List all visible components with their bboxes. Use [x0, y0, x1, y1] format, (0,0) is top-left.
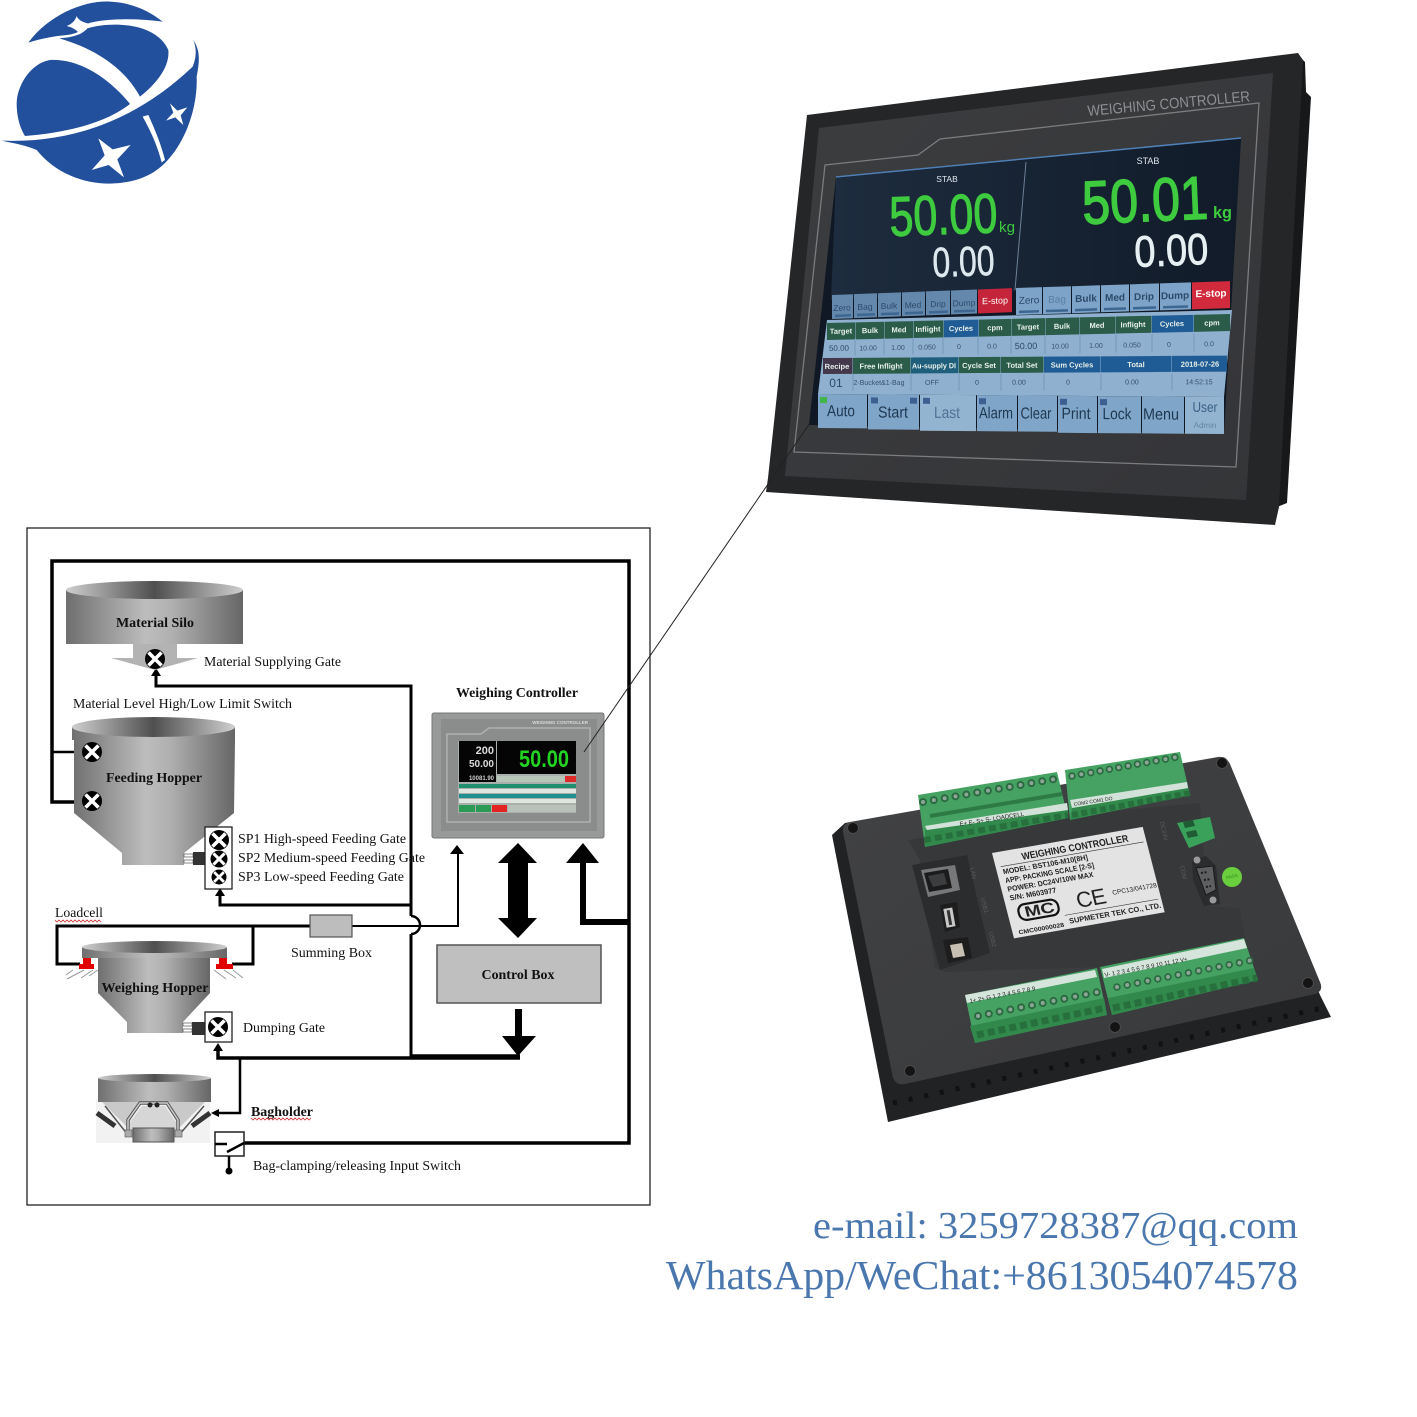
table row 1 values: 1.00	[891, 345, 905, 352]
label: dumping gate: Dumping Gate	[243, 1021, 325, 1036]
table row 2 headers: Recipe	[825, 362, 849, 371]
output arrow	[502, 1009, 536, 1056]
left control buttons: Zero	[833, 302, 851, 313]
feeding hopper: Feeding Hopper	[106, 771, 202, 786]
table row 1 headers: cpm	[1204, 318, 1220, 328]
table row 1 headers: Inflight	[916, 324, 941, 334]
product label plate: CPC13/041728	[1112, 882, 1158, 897]
bottom button bar: Admin	[1194, 421, 1216, 430]
label: loadcell: Loadcell	[55, 906, 103, 921]
table row 2 values: 2-Bucket&1-Bag	[854, 380, 905, 387]
control box	[437, 945, 601, 1003]
table row 1 headers: Bulk	[1054, 322, 1071, 331]
control box: Control Box	[482, 968, 554, 983]
brand text: weighing controller: WEIGHING CONTROLLER	[1087, 88, 1251, 120]
product label plate: MODEL: BST106-M10[8H]	[1002, 853, 1089, 876]
bagholder	[96, 1074, 211, 1143]
right control buttons: Bag	[1048, 294, 1066, 306]
dumping gate box	[205, 1012, 232, 1042]
bottom button bar: Start	[878, 404, 908, 422]
icon: level switch low	[82, 791, 102, 811]
terminal block: bottom right	[1100, 938, 1258, 1015]
main control wiring	[52, 561, 629, 1143]
small controller image: 10081.90	[469, 776, 495, 782]
small controller image: 50.00	[469, 759, 494, 770]
port recess	[912, 855, 990, 970]
product label plate: CE	[1073, 883, 1109, 913]
right control buttons: Zero	[1019, 295, 1040, 307]
green sticker	[1222, 867, 1242, 887]
left control buttons: Bulk	[881, 300, 898, 311]
product label plate: CMC00000028	[1018, 923, 1066, 936]
power terminal	[1177, 817, 1215, 848]
right weight display: 0.00	[1133, 225, 1209, 277]
small controller image: 200	[476, 745, 494, 757]
right control buttons: Drip	[1134, 292, 1154, 303]
table row 1 headers: Cycles	[1160, 319, 1184, 329]
arrow heads	[151, 668, 599, 1117]
panel: system diagram	[27, 528, 650, 1205]
material silo: Material Silo	[116, 616, 194, 631]
right control buttons: E-stop	[1195, 288, 1227, 300]
silk screen port labels: LAN	[968, 867, 976, 880]
product label plate: POWER: DC24V/10W MAX	[1006, 870, 1094, 894]
terminal block: bottom left: 1+ 2+ G 1 2 3 4 5 6 7 8 9	[969, 986, 1037, 1005]
table row 1 values: 10.00	[1051, 343, 1069, 351]
front panel	[766, 53, 1303, 525]
front weighing controller photo	[766, 53, 1311, 525]
right control buttons	[1016, 281, 1230, 315]
left control buttons: E-stop	[982, 295, 1008, 306]
left weight display: STAB	[936, 174, 958, 184]
table row 2 headers	[823, 356, 1227, 374]
icon: supplying gate	[145, 649, 165, 669]
small controller image	[432, 713, 604, 838]
rear body	[843, 757, 1321, 1084]
table row 1 headers: Bulk	[862, 326, 879, 335]
table row 1 values: 50.00	[1015, 341, 1037, 351]
housing behind the panel	[1270, 55, 1311, 507]
product label plate: SUPMETER TEK CO., LTD.	[1068, 901, 1162, 926]
table row 2 values: 0	[975, 380, 979, 387]
labels: speed gates: SP2 Medium-speed Feeding Gate	[238, 851, 425, 866]
bottom button bar: User	[1192, 399, 1218, 415]
feeding gates box	[205, 827, 232, 889]
contact text	[666, 1205, 1298, 1298]
leader line	[584, 423, 810, 752]
table row 2 headers: Sum Cycles	[1051, 360, 1093, 370]
left weight display	[888, 174, 1015, 286]
ethernet port	[921, 865, 960, 897]
left weight display: kg	[999, 219, 1015, 236]
labels: speed gates: SP1 High-speed Feeding Gate	[238, 832, 406, 847]
table row 2 headers: 2018-07-26	[1181, 360, 1219, 369]
bidirectional arrow	[498, 843, 537, 938]
table row 1 values: 50.00	[829, 344, 850, 353]
bottom button bar: Print	[1062, 406, 1091, 423]
recessed area	[908, 803, 1245, 972]
table background	[818, 310, 1232, 397]
usb B port	[943, 937, 972, 963]
label: summing box: Summing Box	[291, 946, 372, 961]
terminal block: top right	[1065, 752, 1190, 820]
rear controller photo	[832, 752, 1331, 1122]
summing box	[310, 915, 352, 937]
whatsapp and wechat: WhatsApp/WeChat:+8613054074578	[666, 1252, 1298, 1298]
icon: level switch high	[82, 742, 102, 762]
feeding hopper	[72, 717, 235, 865]
material silo	[66, 581, 243, 670]
mounting screws	[848, 758, 1314, 1076]
left control buttons: Drip	[930, 299, 946, 309]
table row 1 headers: Target	[1017, 322, 1040, 332]
silk screen port labels: COM	[1178, 865, 1187, 880]
left weight display: 0.00	[932, 237, 995, 286]
table row 1 values: 0	[1167, 342, 1171, 349]
table row 2 headers: Free Inflight	[860, 362, 903, 371]
silk screen port labels	[968, 821, 1187, 948]
terminal block: bottom left	[965, 968, 1107, 1043]
product label plate: S/N: M603977	[1009, 886, 1057, 902]
weighing hopper: Weighing Hopper	[102, 981, 208, 996]
heading: weighing controller: Weighing Controller	[456, 686, 578, 701]
table row 2 values: 14:52:15	[1185, 379, 1213, 386]
usb A port	[940, 902, 960, 932]
email: e-mail: 3259728387@qq.com	[813, 1205, 1298, 1247]
left weight display: 50.00	[888, 181, 998, 248]
table row 1 headers: cpm	[987, 323, 1003, 332]
feeding gate actuator	[184, 852, 205, 865]
table row 2 headers: Total	[1127, 360, 1145, 369]
table row 1 values: 0.050	[918, 344, 936, 352]
product label plate	[992, 827, 1165, 938]
bottom button bar: Auto	[827, 403, 855, 420]
table row 2 values: 01	[829, 376, 843, 390]
table row 2 values: 0.00	[1012, 380, 1026, 387]
left control buttons: Med	[905, 300, 922, 310]
logo: blue globe with stars	[2, 2, 199, 184]
label: switch: Bag-clamping/releasing Input Switch	[253, 1159, 461, 1174]
terminal block: bottom right: V- 1 2 3 4 5 6 7 8 9 10 11 12 V+	[1104, 957, 1189, 979]
table row 1 values: 0	[957, 344, 961, 351]
label: level limit switch: Material Level High/Low Limit Switch	[73, 697, 292, 712]
right weight display: kg	[1213, 203, 1232, 222]
right weight display	[1081, 156, 1232, 277]
labels: speed gates	[238, 832, 425, 885]
table row 1 values: 0.0	[987, 343, 997, 351]
diagram frame	[27, 528, 650, 1205]
product label plate: WEIGHING CONTROLLER	[1021, 834, 1130, 863]
table row 1 headers: Med	[892, 325, 907, 335]
left control buttons: Dump	[953, 298, 976, 308]
table row 1 values	[829, 333, 1214, 357]
table row 1 values: 0.050	[1123, 342, 1141, 350]
product label plate: APP: PACKING SCALE [2-S]	[1004, 861, 1096, 885]
bottom button bar: Alarm	[979, 405, 1013, 422]
table row 1 values: 1.00	[1089, 343, 1103, 350]
table row 1 values: 10.00	[859, 345, 877, 353]
table row 2 headers: Au-supply DI	[912, 361, 956, 370]
bottom button bar: Lock	[1102, 406, 1132, 423]
bottom button bar: Clear	[1020, 405, 1052, 423]
terminal block: top left: E+ E- S+ S- LOADCELL	[959, 812, 1025, 828]
silk screen port labels: USB2	[987, 931, 996, 948]
bottom button bar: Menu	[1143, 406, 1179, 424]
terminal block: top right: COM2 COM1 DO	[1073, 796, 1113, 808]
right control buttons: Med	[1105, 293, 1125, 304]
serial port	[1192, 856, 1220, 906]
silk screen port labels: DC24V	[1158, 821, 1168, 841]
weighing hopper	[82, 941, 227, 1033]
bezel outline	[794, 103, 1259, 467]
small controller image: WEIGHING CONTROLLER	[532, 720, 589, 725]
bottom button bar	[818, 394, 1224, 434]
table row 2 headers: Cycle Set	[962, 361, 996, 370]
table row 2 values: 0	[1066, 380, 1070, 387]
table row 2 values: OFF	[925, 380, 939, 387]
table row 1 values: 0.0	[1204, 341, 1214, 348]
table row 1 headers: Med	[1090, 321, 1105, 330]
table row 1 headers	[827, 314, 1230, 340]
right control buttons: Dump	[1161, 290, 1189, 302]
dumping gate actuator	[183, 1022, 205, 1035]
rear flange	[832, 760, 1331, 1122]
table row 1 headers: Inflight	[1121, 320, 1146, 329]
right control buttons: Bulk	[1075, 293, 1097, 305]
silk screen port labels: USB1	[979, 897, 988, 914]
touch screen	[809, 138, 1241, 433]
left control buttons: Bag	[857, 301, 873, 312]
terminal block: top left	[918, 772, 1068, 847]
table row 2 values: 0.00	[1125, 379, 1139, 386]
green sticker: PASS	[1226, 873, 1238, 880]
product label plate: MC	[1023, 899, 1057, 921]
right weight display: 50.01	[1081, 164, 1209, 237]
table row 2 headers: Total Set	[1006, 361, 1038, 370]
small controller image: 50.00	[519, 746, 569, 773]
bag clamp switch	[215, 1132, 244, 1174]
right weight display: STAB	[1137, 156, 1159, 166]
table row 1 headers: Target	[830, 326, 853, 336]
table row 2 values	[829, 373, 1213, 391]
loadcell left	[66, 958, 98, 979]
label: material supplying gate: Material Supplying Gate	[204, 655, 341, 670]
labels: speed gates: SP3 Low-speed Feeding Gate	[238, 870, 404, 885]
left control buttons	[832, 288, 1012, 319]
table row 1 headers: Cycles	[949, 324, 973, 333]
bottom button bar: Last	[934, 405, 960, 422]
label: bagholder: Bagholder	[251, 1105, 313, 1120]
loadcell right	[214, 958, 243, 979]
